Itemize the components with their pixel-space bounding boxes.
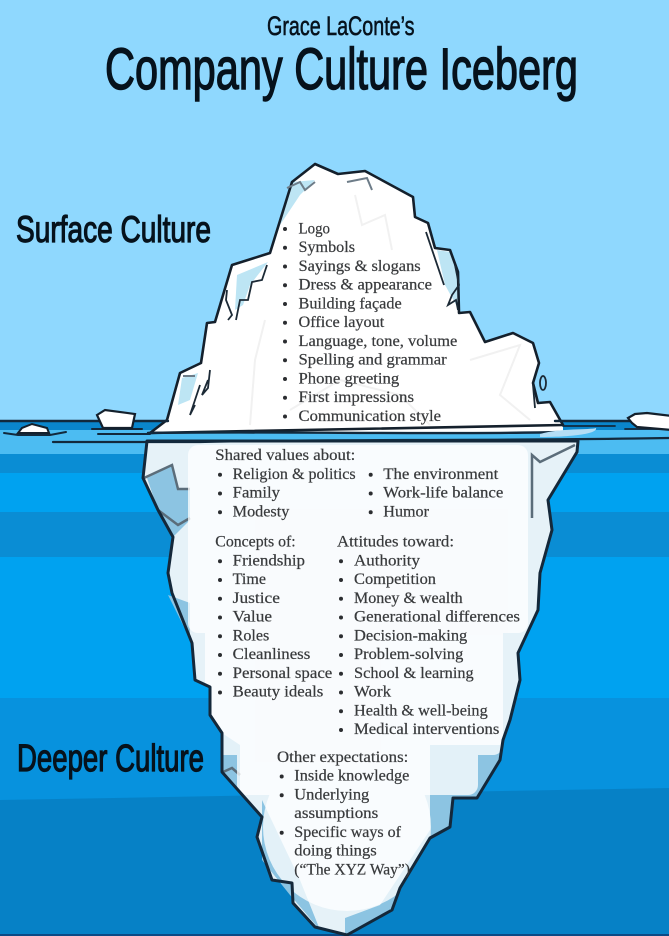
- list: shared values: Family: [233, 485, 280, 502]
- list: surface culture items: Phone greeting: [298, 370, 400, 387]
- ice crack lines: [144, 445, 575, 775]
- list: concepts: Friendship: [233, 552, 305, 570]
- list: attitudes: Competition: [354, 571, 436, 588]
- list: other expectations: Inside knowledge: [294, 768, 409, 785]
- list: surface culture items: Language, tone, volume: [298, 333, 457, 350]
- list: shared values: [215, 447, 503, 520]
- list: surface culture items: First impressions: [298, 389, 414, 406]
- list: surface culture items: Logo: [298, 220, 330, 237]
- list: other expectations: doing things: [294, 843, 377, 860]
- list: other expectations: Specific ways of: [294, 824, 402, 841]
- list: shared values: Humor: [383, 504, 430, 520]
- small iceberg right: [628, 413, 669, 430]
- list: concepts: Cleanliness: [233, 646, 310, 663]
- list: shared values: Work-life balance: [383, 485, 503, 502]
- list: surface culture items: Spelling and grammar: [298, 352, 448, 368]
- list: attitudes: Health & well-being: [354, 702, 488, 720]
- list: other expectations: assumptions: [294, 805, 378, 822]
- list: attitudes: [337, 534, 520, 738]
- faint ice cracks: [250, 195, 530, 425]
- list: surface culture items: Building façade: [298, 295, 402, 312]
- list: surface culture items: Dress & appearance: [298, 276, 432, 294]
- ocean background bands: [0, 421, 669, 936]
- list: shared values: Religion & politics: [233, 466, 356, 483]
- list: shared values: Modesty: [233, 504, 290, 520]
- waterline strokes: [0, 421, 669, 442]
- list: concepts: Personal space: [233, 665, 332, 682]
- list: concepts: Justice: [233, 590, 280, 607]
- list: shared values: Shared values about:: [215, 447, 355, 464]
- list: attitudes: Medical interventions: [354, 721, 499, 738]
- heading: surface culture: Surface Culture: [16, 209, 211, 250]
- list: other expectations: [277, 749, 410, 878]
- list: surface culture items: Office layout: [298, 314, 385, 331]
- list: attitudes: Attitudes toward:: [337, 534, 454, 551]
- sky background: [0, 0, 669, 421]
- list: attitudes: Work: [354, 684, 391, 701]
- list: concepts: Concepts of:: [215, 534, 296, 551]
- list: attitudes: Authority: [354, 552, 420, 570]
- subtitle: Grace LaConte’s: [267, 11, 414, 41]
- list: concepts: Value: [233, 609, 272, 626]
- iceberg outline: [143, 441, 578, 935]
- water highlight: [540, 428, 596, 437]
- heading: deeper culture: Deeper Culture: [17, 738, 204, 780]
- list: attitudes: School & learning: [354, 665, 474, 682]
- list: surface culture items: Communication style: [298, 408, 441, 425]
- drip lines: [190, 232, 546, 415]
- list: concepts: Roles: [233, 628, 269, 644]
- list: surface culture items: [283, 220, 457, 425]
- list: concepts: Beauty ideals: [233, 684, 323, 701]
- list: shared values: The environment: [383, 466, 499, 483]
- list: attitudes: Generational differences: [354, 609, 520, 626]
- ice shading: [178, 180, 459, 405]
- list: attitudes: Problem-solving: [354, 646, 464, 663]
- list: surface culture items: Sayings & slogans: [298, 258, 421, 275]
- surface iceberg: [150, 164, 563, 433]
- small iceberg left: [18, 424, 49, 433]
- list: surface culture items: Symbols: [298, 239, 355, 256]
- ice shadows: [147, 465, 500, 935]
- list: other expectations: Underlying: [294, 786, 370, 804]
- list: other expectations: (“The XYZ Way”): [294, 862, 410, 878]
- small iceberg center-left: [97, 410, 135, 428]
- list: attitudes: Money & wealth: [354, 590, 463, 607]
- translucent panels: lower iceberg: [188, 445, 528, 911]
- underwater iceberg: [143, 441, 578, 935]
- list: concepts: Time: [233, 571, 266, 588]
- list: concepts: [215, 534, 332, 701]
- list: other expectations: Other expectations:: [277, 749, 408, 766]
- list: attitudes: Decision-making: [354, 628, 468, 644]
